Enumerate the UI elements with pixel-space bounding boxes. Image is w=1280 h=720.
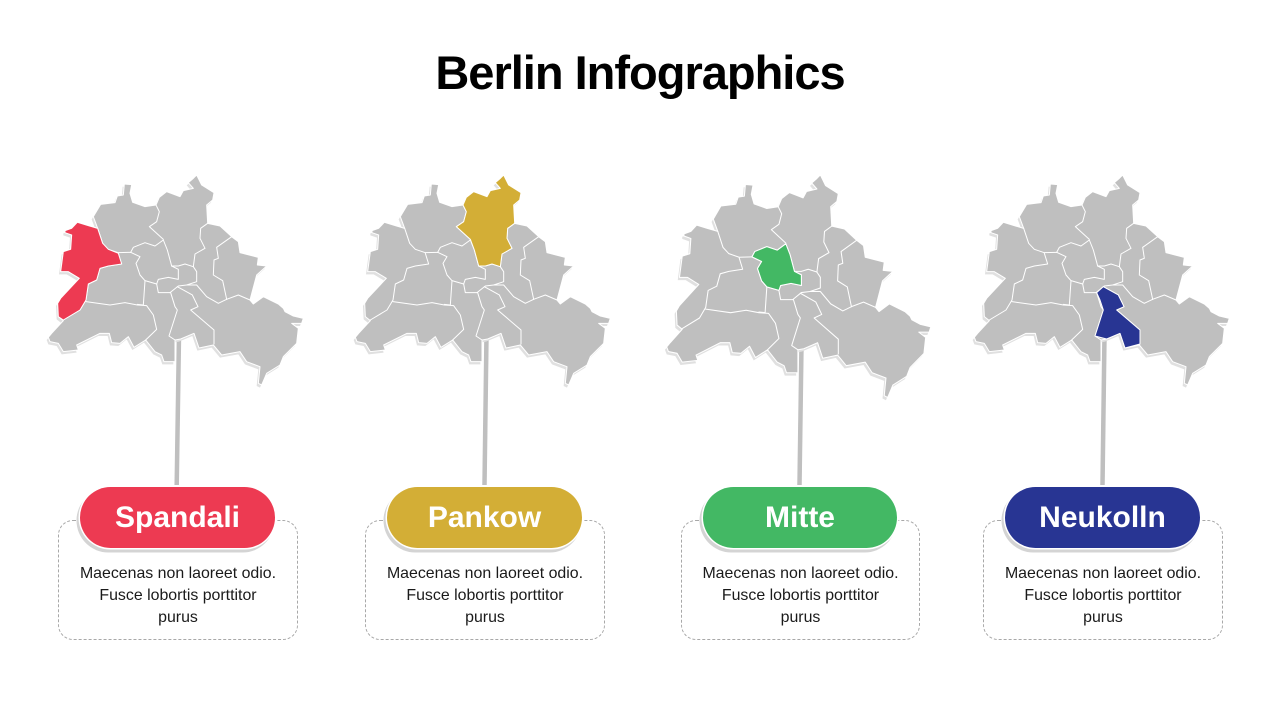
- map: Neukolln highlighted: [973, 175, 1229, 388]
- dashed box: [681, 520, 920, 640]
- card: Mitte: [681, 487, 920, 640]
- description: [80, 565, 276, 626]
- stem: Neukolln: [1102, 335, 1104, 485]
- description: [702, 565, 899, 626]
- pill: Neukolln: [1005, 487, 1200, 548]
- description: Maecenas non laoreet odio.: [702, 565, 899, 582]
- title: Berlin Infographics: [435, 46, 845, 99]
- card: Pankow: [365, 487, 605, 640]
- pill: Spandali: [80, 487, 275, 548]
- description: purus: [1083, 609, 1123, 626]
- pill: Mitte: [703, 487, 897, 548]
- pill: Pankow: [387, 487, 582, 548]
- description: Maecenas non laoreet odio.: [80, 565, 276, 582]
- card: Neukolln: [983, 487, 1223, 640]
- description: Maecenas non laoreet odio.: [387, 565, 583, 582]
- description: purus: [465, 609, 505, 626]
- pill: Neukolln: Neukolln: [1039, 501, 1166, 534]
- pill: Mitte: Mitte: [765, 501, 835, 534]
- description: Fusce lobortis porttitor: [722, 587, 879, 604]
- stem: Mitte: [800, 345, 802, 485]
- dashed box: [365, 520, 605, 640]
- stem: Spandali: [177, 335, 179, 485]
- description: purus: [158, 609, 198, 626]
- pill: Pankow: Pankow: [428, 501, 541, 534]
- description: Fusce lobortis porttitor: [1024, 587, 1182, 604]
- map: Pankow highlighted: [354, 175, 610, 388]
- map: Spandali highlighted: [47, 175, 303, 388]
- map: Mitte highlighted: [665, 175, 931, 400]
- description: purus: [781, 609, 820, 626]
- description: [387, 565, 583, 626]
- stem: Pankow: [484, 335, 486, 485]
- pill: Spandali: Spandali: [115, 501, 240, 534]
- description: [1005, 565, 1201, 626]
- card: Spandali: [58, 487, 298, 640]
- dashed box: [58, 520, 298, 640]
- dashed box: [983, 520, 1223, 640]
- description: Fusce lobortis porttitor: [406, 587, 564, 604]
- description: Fusce lobortis porttitor: [99, 587, 257, 604]
- description: Maecenas non laoreet odio.: [1005, 565, 1201, 582]
